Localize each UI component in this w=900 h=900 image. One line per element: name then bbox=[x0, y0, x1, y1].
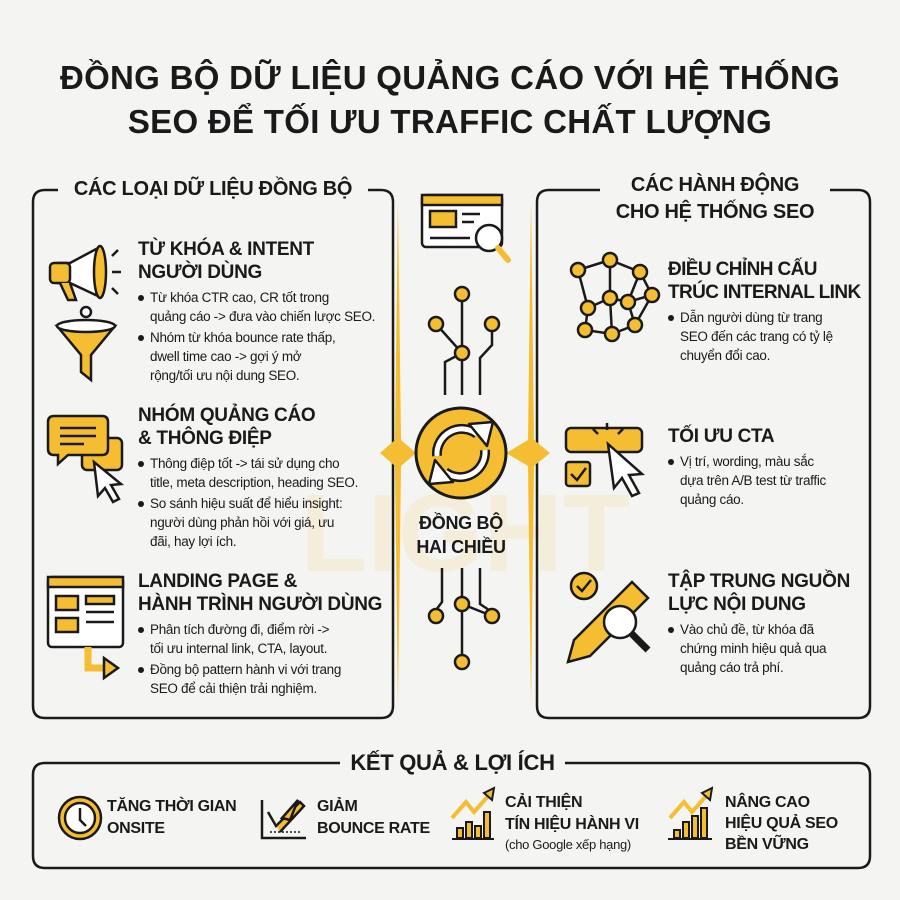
icon: funnel bbox=[57, 307, 115, 380]
item: content focus bbox=[668, 570, 850, 675]
icon: megaphone bbox=[50, 246, 121, 300]
result: behavior signals: TÍN HIỆU HÀNH VI bbox=[505, 816, 639, 833]
item: ad groups: & THÔNG ĐIỆP bbox=[138, 428, 272, 449]
item: internal link: SEO đến các trang có tỷ lệ bbox=[680, 329, 833, 344]
item: keywords: Nhóm từ khóa bounce rate thấp, bbox=[150, 330, 335, 345]
icon: bounce down bbox=[262, 800, 306, 838]
icon: CTA button bbox=[566, 423, 642, 496]
heading: left panel: CÁC LOẠI DỮ LIỆU ĐỒNG BỘ bbox=[74, 178, 352, 200]
item: keywords: quảng cáo -> đưa vào chiến lược SEO. bbox=[150, 309, 375, 324]
item: content focus: TẬP TRUNG NGUỒN bbox=[668, 571, 850, 592]
item: ad groups: đãi, hay lợi ích. bbox=[150, 534, 236, 549]
result: behavior signals: (cho Google xếp hạng) bbox=[505, 837, 631, 852]
title: SEO ĐỂ TỐI ƯU TRAFFIC CHẤT LƯỢNG bbox=[128, 103, 772, 140]
item: internal link: ĐIỀU CHỈNH CẤU bbox=[668, 259, 817, 280]
item: landing page: Đồng bộ pattern hành vi với trang bbox=[150, 662, 341, 677]
item: landing page: tối ưu internal link, CTA, layout. bbox=[150, 641, 327, 656]
item: CTA: dựa trên A/B test từ traffic bbox=[680, 473, 826, 488]
circuit bottom bbox=[429, 568, 499, 669]
result: time onsite: ONSITE bbox=[107, 820, 165, 837]
panel frame: right bbox=[537, 190, 870, 718]
item: landing page: LANDING PAGE & bbox=[138, 571, 297, 592]
circuit top bbox=[429, 287, 499, 395]
item: keywords: Từ khóa CTR cao, CR tốt trong bbox=[150, 290, 329, 305]
panel frame: bottom bbox=[33, 763, 870, 868]
heading: right panel: CÁC HÀNH ĐỘNG bbox=[631, 174, 799, 196]
result: SEO performance: NÂNG CAO bbox=[725, 794, 810, 811]
result: time onsite bbox=[107, 796, 236, 837]
icon: growth chart 2 bbox=[668, 788, 712, 839]
title bbox=[60, 59, 840, 140]
item: ad groups bbox=[138, 404, 358, 549]
item: internal link: TRÚC INTERNAL LINK bbox=[668, 282, 861, 303]
result: bounce rate bbox=[317, 797, 430, 837]
icon: chat bubbles bbox=[48, 416, 122, 502]
icon: network bbox=[571, 253, 659, 341]
heading: right panel bbox=[616, 172, 814, 223]
item: internal link: chuyển đổi cao. bbox=[680, 348, 770, 363]
item: keywords bbox=[138, 238, 375, 383]
icon: clock bbox=[59, 797, 101, 839]
title: ĐỒNG BỘ DỮ LIỆU QUẢNG CÁO VỚI HỆ THỐNG bbox=[60, 59, 840, 96]
center label: ĐỒNG BỘ bbox=[419, 513, 503, 533]
item: content focus: chứng minh hiệu quả qua bbox=[680, 641, 826, 656]
sync circle icon bbox=[416, 408, 506, 498]
item: landing page: Phân tích đường đi, điểm rời -> bbox=[150, 622, 329, 637]
center label: HAI CHIỀU bbox=[416, 537, 506, 557]
item: ad groups: Thông điệp tốt -> tái sử dụng cho bbox=[150, 456, 339, 471]
panel frame: left bbox=[33, 190, 393, 718]
heading: results: KẾT QUẢ & LỢI ÍCH bbox=[350, 750, 555, 775]
item: CTA: Vị trí, wording, màu sắc bbox=[680, 454, 814, 469]
item: ad groups: người dùng phản hồi với giá, ưu bbox=[150, 515, 334, 530]
item: landing page: SEO để cải thiện trải nghiệm. bbox=[150, 681, 317, 696]
icon: browser search bbox=[422, 195, 508, 260]
item: internal link: Dẫn người dùng từ trang bbox=[680, 310, 822, 325]
item: CTA: quảng cáo. bbox=[680, 492, 744, 507]
item: content focus: quảng cáo trả phí. bbox=[680, 660, 783, 675]
result: SEO performance: HIỆU QUẢ SEO bbox=[725, 815, 838, 832]
icon: pencil & magnifier bbox=[568, 573, 648, 662]
result: bounce rate: GIẢM bbox=[317, 798, 358, 815]
item: internal link bbox=[668, 258, 861, 363]
item: ad groups: title, meta description, heading SEO. bbox=[150, 475, 358, 490]
item: landing page: HÀNH TRÌNH NGƯỜI DÙNG bbox=[138, 594, 382, 615]
watermark: LIGHT bbox=[300, 472, 630, 595]
result: time onsite: TĂNG THỜI GIAN bbox=[107, 798, 236, 815]
item: keywords: rộng/tối ưu nội dung SEO. bbox=[150, 368, 299, 383]
item: content focus: Vào chủ đề, từ khóa đã bbox=[680, 622, 814, 637]
item: CTA bbox=[668, 424, 826, 507]
item: landing page bbox=[138, 571, 382, 696]
result: behavior signals: CẢI THIỆN bbox=[505, 794, 582, 811]
item: ad groups: NHÓM QUẢNG CÁO bbox=[138, 405, 315, 426]
item: keywords: dwell time cao -> gợi ý mở bbox=[150, 349, 301, 364]
result: behavior signals bbox=[505, 792, 639, 852]
item: content focus: LỰC NỘI DUNG bbox=[668, 594, 806, 615]
item: CTA: TỐI ƯU CTA bbox=[668, 426, 774, 447]
result: SEO performance bbox=[725, 792, 838, 853]
icon: growth chart 1 bbox=[452, 788, 494, 839]
heading: right panel: CHO HỆ THỐNG SEO bbox=[616, 201, 814, 223]
center label bbox=[416, 512, 506, 557]
result: SEO performance: BỀN VỮNG bbox=[725, 836, 809, 853]
item: keywords: NGƯỜI DÙNG bbox=[138, 262, 262, 283]
icon: landing page bbox=[48, 577, 123, 678]
result: bounce rate: BOUNCE RATE bbox=[317, 820, 430, 837]
item: ad groups: So sánh hiệu suất để hiểu insight: bbox=[150, 496, 342, 511]
item: keywords: TỪ KHÓA & INTENT bbox=[138, 239, 314, 260]
yellow connector spikes bbox=[380, 200, 550, 705]
